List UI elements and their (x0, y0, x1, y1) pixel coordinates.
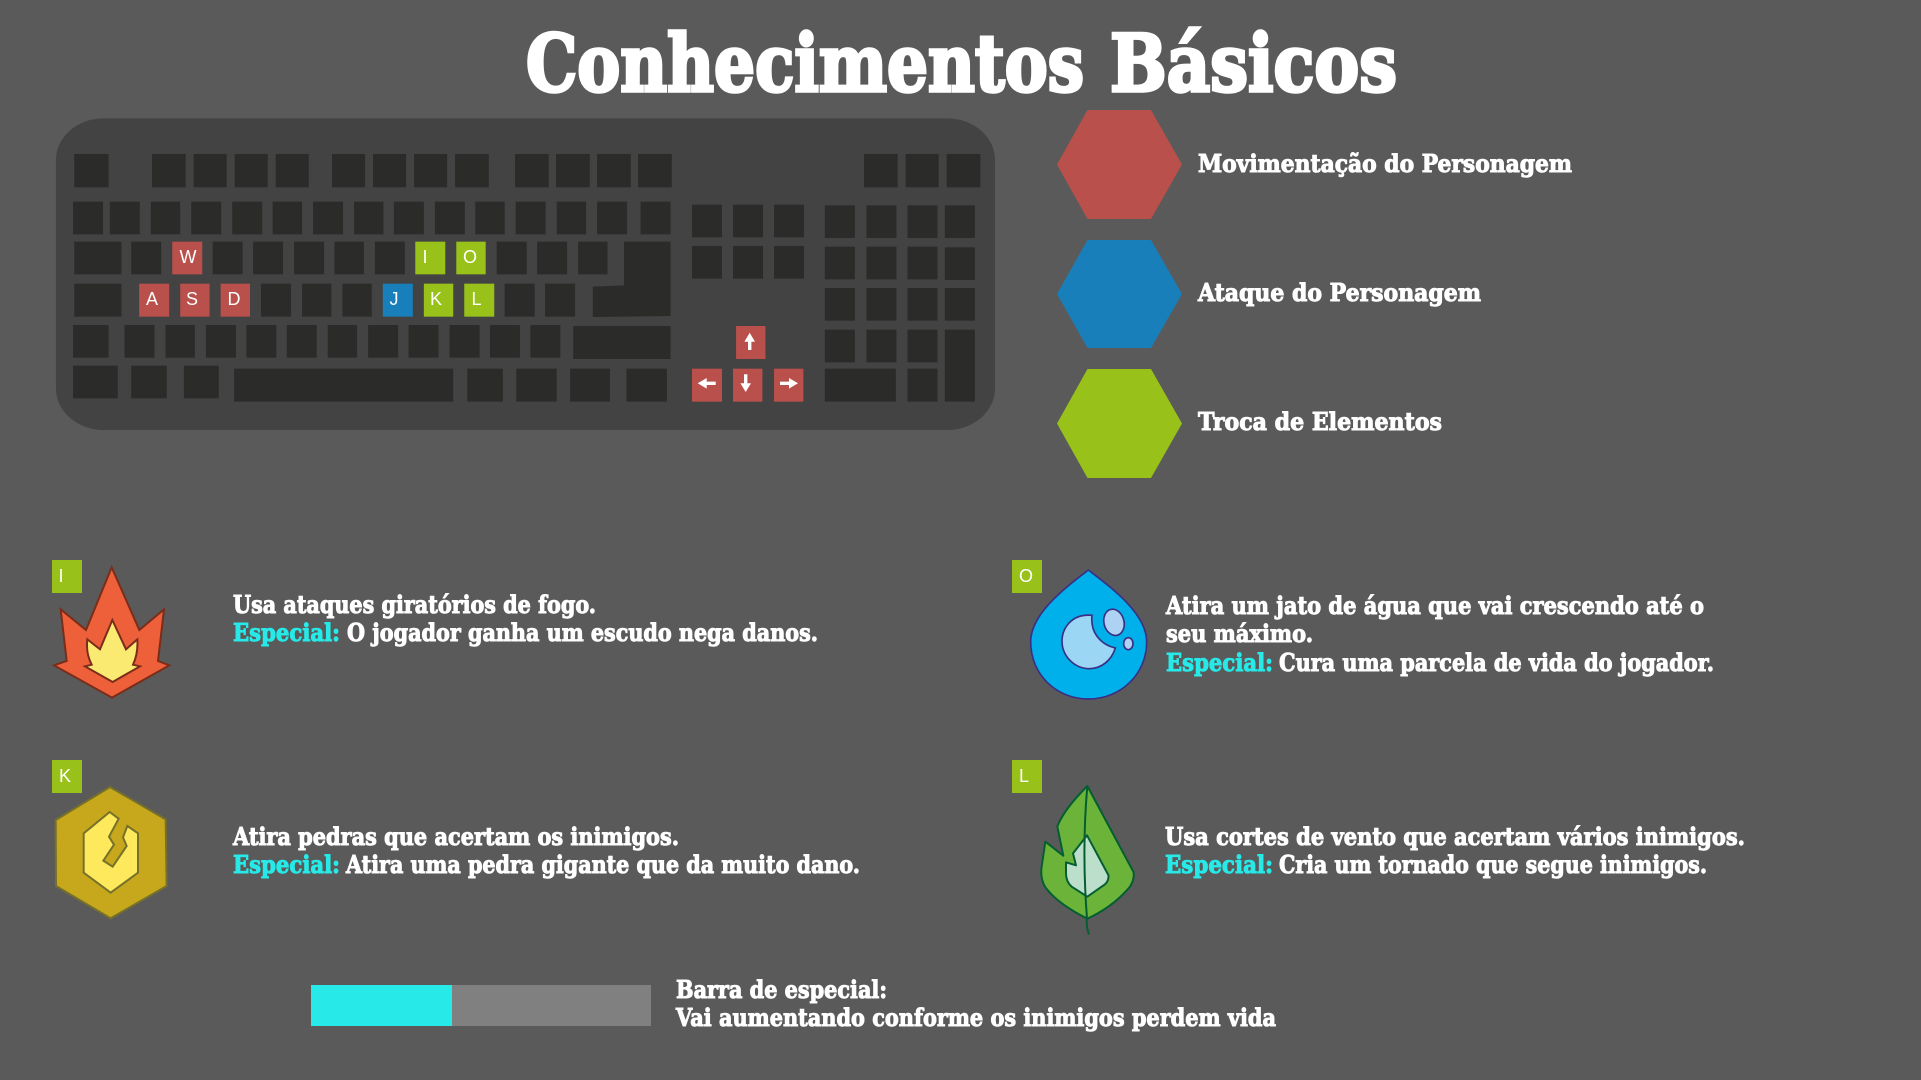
earth description (232, 822, 860, 879)
icon: water drop (1031, 570, 1147, 699)
key labels (146, 247, 482, 309)
keyboard keys (56, 118, 995, 430)
hexagon: attack (1057, 240, 1182, 348)
fire description: O jogador ganha um escudo nega danos. (347, 618, 818, 647)
wind description: Usa cortes de vento que acertam vários inimigos. (1165, 822, 1745, 851)
key badge O (1012, 560, 1042, 593)
key labels: I (422, 247, 428, 267)
key labels: O (463, 247, 477, 267)
icon: fire (54, 567, 169, 698)
icon: leaf (1041, 786, 1134, 934)
wind description (1165, 822, 1745, 879)
panel: fire element (52, 560, 818, 698)
earth description: Atira pedras que acertam os inimigos. (232, 822, 679, 851)
hexagon: element swap (1057, 369, 1182, 478)
panel: earth element (52, 760, 860, 918)
key labels: W (180, 247, 196, 267)
keyboard (56, 118, 995, 430)
title: Conhecimentos (526, 17, 1084, 110)
special bar (311, 985, 651, 1026)
icon: rock (56, 787, 167, 918)
earth description: Atira uma pedra gigante que da muito dano. (345, 850, 860, 879)
special bar description (675, 975, 1276, 1032)
fire description: Especial: (233, 618, 340, 647)
key badge L: L (1019, 766, 1029, 786)
legend label: movement: Movimentação do Personagem (1198, 149, 1572, 178)
key badge O: O (1019, 566, 1033, 586)
panel: water element (1012, 560, 1714, 699)
legend (1057, 110, 1572, 478)
water description (1165, 591, 1714, 677)
water description: Atira um jato de água que vai crescendo até o (1165, 591, 1704, 620)
water description: Cura uma parcela de vida do jogador. (1279, 648, 1714, 677)
key labels: L (471, 289, 482, 309)
key labels: J (390, 289, 398, 309)
key labels: A (146, 289, 158, 309)
key labels: S (186, 289, 198, 309)
legend label: element swap: Troca de Elementos (1198, 407, 1442, 436)
hexagon: movement (1057, 110, 1182, 219)
special bar description: Vai aumentando conforme os inimigos perdem vida (675, 1003, 1276, 1032)
key badge L (1012, 760, 1042, 793)
wind description: Especial: (1165, 850, 1273, 879)
water description: Especial: (1166, 648, 1273, 677)
fire description (233, 590, 818, 647)
water description: seu máximo. (1166, 619, 1313, 648)
key badge I (52, 560, 82, 593)
key badge K (52, 760, 82, 793)
panel: wind element (1012, 760, 1745, 934)
arrow key icons (698, 333, 798, 392)
title: Básicos (1110, 17, 1397, 110)
wind description: Cria um tornado que segue inimigos. (1279, 850, 1707, 879)
special bar description: Barra de especial: (676, 975, 887, 1004)
earth description: Especial: (233, 850, 340, 879)
key labels: K (430, 289, 442, 309)
legend label: attack: Ataque do Personagem (1197, 278, 1481, 307)
fire description: Usa ataques giratórios de fogo. (233, 590, 596, 619)
key badge I: I (58, 566, 64, 586)
key badge K: K (59, 766, 71, 786)
key labels: D (228, 289, 240, 309)
